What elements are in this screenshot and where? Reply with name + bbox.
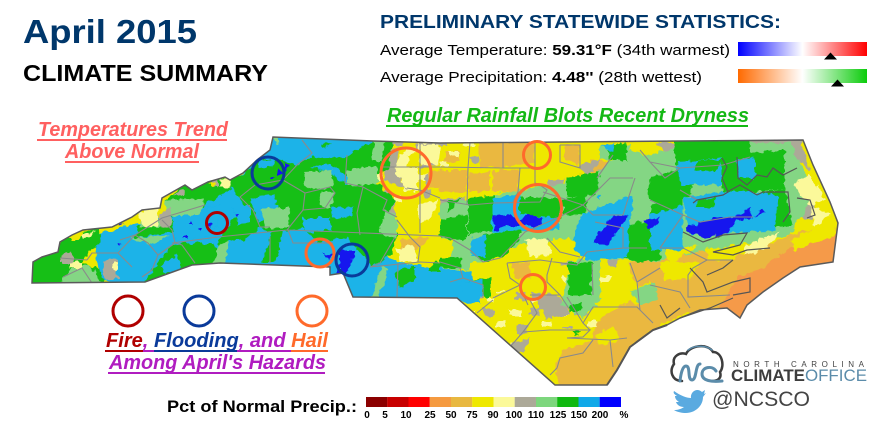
legend labels: 25 xyxy=(424,410,436,421)
green north band xyxy=(300,142,394,176)
legend labels: 150 xyxy=(571,410,588,421)
hail marker xyxy=(381,148,431,198)
hail marker xyxy=(524,142,550,168)
logo wordmark: CLIMATEOFFICE xyxy=(731,366,867,385)
orange coast xyxy=(718,234,836,317)
dark blue east xyxy=(492,208,765,245)
legend labels: 110 xyxy=(528,410,545,421)
twitter handle: @NCSCO xyxy=(712,388,810,411)
state outline xyxy=(32,137,838,385)
legend labels: 100 xyxy=(506,410,523,421)
legend labels: 5 xyxy=(382,410,388,421)
legend labels: 50 xyxy=(445,410,457,421)
legend swatches xyxy=(366,397,621,407)
tan areas xyxy=(440,136,750,392)
dark blue west xyxy=(117,163,355,278)
precipitation statistic: Average Precipitation: 4.48'' (28th wettest) xyxy=(380,69,702,86)
green southern strips xyxy=(395,262,445,288)
legend labels: % xyxy=(620,410,629,421)
legend title: Pct of Normal Precip.: xyxy=(167,398,357,416)
hail marker xyxy=(520,274,546,300)
fire marker xyxy=(206,212,228,234)
icon: twitter bird xyxy=(674,390,706,413)
callout: hazards: Fire, Flooding, and Hail xyxy=(106,330,328,352)
gray west xyxy=(62,178,218,280)
legend labels: 90 xyxy=(487,410,499,421)
map: percent of normal precipitation xyxy=(31,136,839,386)
callout: rainfall heading: Regular Rainfall Blots Recent Dryness xyxy=(387,105,749,127)
hazard circles on map xyxy=(206,142,562,300)
callout: temperature xyxy=(37,119,229,163)
blue west xyxy=(95,130,480,305)
hail legend circle xyxy=(297,296,327,326)
green foothills xyxy=(135,158,398,266)
flooding marker xyxy=(252,157,284,189)
logo text: NORTH CAROLINA xyxy=(733,360,865,369)
title: April 2015 xyxy=(23,13,197,50)
logo: North Carolina Climate Office xyxy=(672,346,867,385)
legend labels: 125 xyxy=(550,410,567,421)
subtitle: CLIMATE SUMMARY xyxy=(23,60,268,86)
callout: hazards xyxy=(105,330,328,374)
legend labels: 75 xyxy=(466,410,478,421)
green south mountains xyxy=(144,242,218,282)
callout: hazards: Among April's Hazards xyxy=(108,352,326,374)
gray patches xyxy=(370,138,815,355)
flooding legend circle xyxy=(184,296,214,326)
temperature rank bar xyxy=(738,42,867,60)
statistics heading: PRELIMINARY STATEWIDE STATISTICS: xyxy=(380,12,781,32)
estuaries xyxy=(660,157,815,318)
blue east xyxy=(440,142,778,298)
green far west xyxy=(32,229,104,282)
pale yellow and yellow west xyxy=(70,145,440,270)
band of tan below orange coast xyxy=(742,227,836,274)
hail marker xyxy=(306,239,334,267)
flooding marker xyxy=(336,244,368,276)
legend: hazard circles xyxy=(113,296,327,326)
legend labels: 0 xyxy=(364,410,370,421)
legend labels: 200 xyxy=(592,410,609,421)
hail marker xyxy=(514,184,562,232)
panel: statewide statistics xyxy=(380,12,867,86)
green central band xyxy=(440,140,792,336)
icon: cloud xyxy=(672,346,722,381)
legend labels xyxy=(364,410,629,421)
callout: temperature: Temperatures Trend xyxy=(38,119,229,141)
mottled transition area xyxy=(376,142,620,345)
legend labels: 10 xyxy=(400,410,412,421)
fire legend circle xyxy=(113,296,143,326)
east light green xyxy=(440,142,815,318)
light green west xyxy=(60,135,398,300)
precipitation rank bar xyxy=(738,69,867,86)
county boundaries xyxy=(60,140,753,375)
temperature statistic: Average Temperature: 59.31°F (34th warmest) xyxy=(380,42,730,59)
precipitation legend xyxy=(167,397,629,421)
callout: temperature: Above Normal xyxy=(64,141,199,163)
